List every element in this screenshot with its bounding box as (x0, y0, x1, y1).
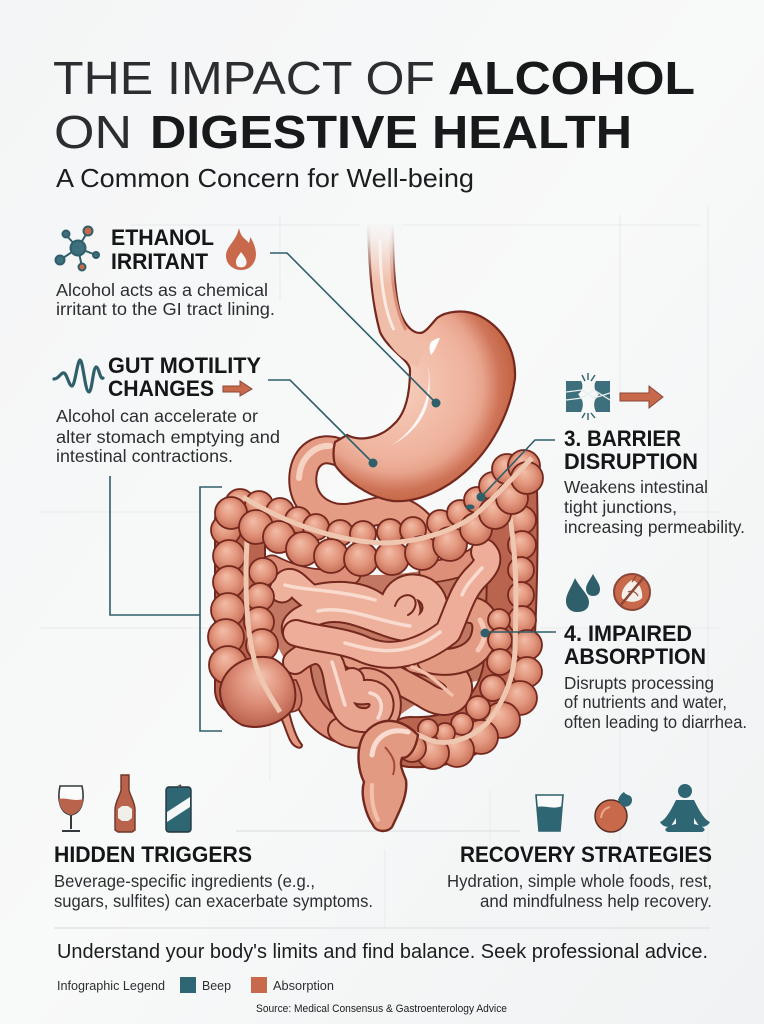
icon: wave (54, 360, 103, 392)
text block: Alcohol can accelerate or (56, 406, 258, 426)
text block (564, 673, 747, 732)
heading: ABSORPTION (564, 644, 706, 669)
panel: recovery strategies (447, 784, 712, 911)
bracket: intestines (110, 476, 222, 731)
call to action: Understand your body's limits and find balance. Seek professional advice. (57, 940, 708, 963)
ascending colon and cecum (208, 515, 302, 748)
colon body (240, 490, 513, 742)
panel: ethanol irritant (56, 225, 275, 319)
heading (111, 225, 214, 274)
icon: meditation figure (660, 784, 710, 832)
digestive tract illustration (208, 222, 543, 831)
transverse colon front haustra (215, 458, 543, 576)
panel: barrier disruption (564, 373, 745, 537)
arrow (620, 386, 663, 408)
panel: impaired absorption (564, 574, 747, 732)
transverse colon upper haustra (225, 450, 540, 547)
text block: Alcohol acts as a chemical (56, 280, 268, 300)
small intestine loops (272, 552, 487, 736)
heading: ETHANOL (111, 225, 214, 250)
heading: DISRUPTION (564, 449, 698, 474)
esophagus (380, 226, 422, 358)
duodenum (299, 446, 425, 530)
heading: 4. IMPAIRED (564, 621, 692, 646)
text block: and mindfulness help recovery. (480, 891, 712, 911)
icon: water glass (536, 795, 563, 831)
heading: RECOVERY STRATEGIES (460, 842, 712, 867)
title: THE IMPACT OF (53, 52, 435, 104)
heading: IRRITANT (111, 249, 209, 274)
icon: water drops (566, 574, 600, 612)
icon: flame (226, 228, 256, 270)
text block: alter stomach emptying and (56, 427, 280, 447)
icon: fruit (595, 792, 632, 832)
text block (564, 477, 745, 537)
text block: irritant to the GI tract lining. (56, 299, 275, 319)
legend (57, 977, 334, 993)
text block: increasing permeability. (564, 517, 745, 537)
heading: HIDDEN TRIGGERS (54, 842, 252, 867)
text block (56, 406, 280, 466)
panel: gut motility (54, 353, 280, 466)
leader: ethanol irritant (270, 253, 440, 408)
small intestine back mass (261, 545, 497, 738)
text block: intestinal contractions. (56, 446, 233, 466)
icon: broken barrier (566, 373, 610, 420)
legend: Absorption (273, 978, 334, 993)
icon: bottle (115, 775, 135, 832)
text block: Disrupts processing (564, 673, 714, 693)
heading (564, 621, 706, 669)
leader: impaired absorption (480, 628, 556, 638)
text block (56, 280, 275, 319)
leader: barrier disruption (466, 440, 555, 510)
icon: molecule (56, 226, 99, 270)
source: Source: Medical Consensus & Gastroenterology Advice (256, 1003, 507, 1015)
text block: sugars, sulfites) can exacerbate symptoms. (54, 891, 373, 911)
esophagus fade (360, 222, 402, 285)
text block: Hydration, simple whole foods, rest, (447, 871, 712, 891)
text block (447, 871, 712, 911)
title (53, 52, 695, 158)
text block: often leading to diarrhea. (564, 712, 747, 732)
heading: GUT MOTILITY (108, 353, 261, 378)
stomach (334, 225, 515, 501)
legend: Beep (202, 978, 231, 993)
panel: hidden triggers (54, 775, 373, 911)
text block (54, 871, 373, 911)
heading (108, 353, 261, 401)
text block: Weakens intestinal (564, 477, 708, 497)
title: ON (54, 106, 132, 158)
text block: of nutrients and water, (564, 692, 727, 712)
heading: CHANGES (108, 376, 214, 401)
leader lines and markers (110, 253, 556, 731)
icon: wine glass (59, 786, 83, 831)
icon: can (166, 785, 191, 832)
text block: Beverage-specific ingredients (e.g., (54, 871, 315, 891)
title: ALCOHOL (448, 52, 695, 104)
leader: gut motility (268, 380, 378, 468)
rectum (358, 721, 418, 831)
legend: Infographic Legend (57, 978, 165, 993)
arrow (223, 381, 252, 396)
title: DIGESTIVE HEALTH (150, 106, 632, 158)
text block: tight junctions, (564, 497, 677, 517)
descending colon and sigmoid (395, 506, 542, 769)
subtitle: A Common Concern for Well-being (56, 163, 474, 193)
heading (564, 426, 698, 474)
heading: 3. BARRIER (564, 426, 681, 451)
icon: no food (614, 574, 650, 610)
